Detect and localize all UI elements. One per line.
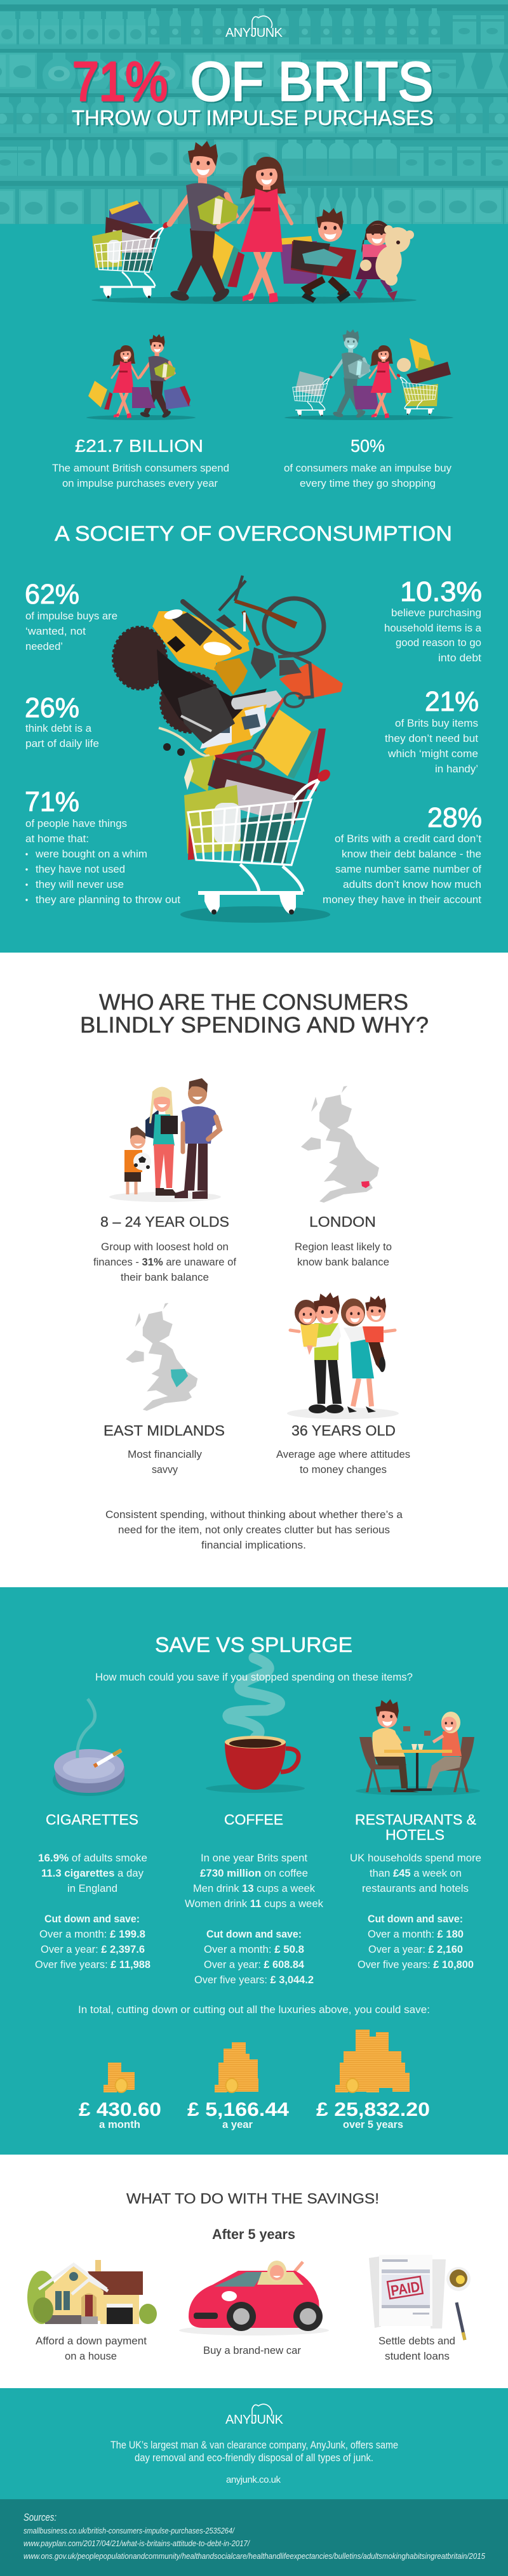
stat: 62%: needed’: [25, 640, 63, 652]
savings: a year: a year: [222, 2118, 253, 2130]
stat: 26%: [25, 692, 99, 750]
panel: East Midlands: EAST MIDLANDS: [104, 1422, 225, 1439]
stat: 71%: they have not used: [36, 863, 125, 875]
text: how much could you save: How much could you save if you stopped spending on these items?: [95, 1671, 413, 1683]
shopping cart contents: [92, 201, 159, 270]
icon: coin pile small: [104, 2063, 135, 2092]
footer: The UK’s largest man & van clearance company, AnyJunk, offers same: [110, 2439, 398, 2451]
panel: cigarettes: [35, 1699, 150, 1971]
savings: a month: £ 430.60: [79, 2098, 161, 2120]
stat: 28%: same number same number of: [335, 863, 481, 875]
panel: cigarettes: 11.3 cigarettes a day: [41, 1867, 144, 1879]
stat: 28%: [323, 802, 482, 906]
savings: a year: [187, 2042, 290, 2130]
heading: who are the consumers: BLINDLY SPENDING AND WHY?: [80, 1013, 429, 1038]
stat: £21.7 billion: [52, 334, 229, 489]
panel: coffee: Over a year: £ 608.84: [204, 1958, 305, 1971]
stat: 71%: they are planning to throw out: [36, 894, 180, 906]
bicycle: [219, 576, 324, 654]
illustration: paid invoice: PAID: [389, 2278, 421, 2299]
girl with teddy bear: [353, 221, 414, 301]
icon: ashtray: [53, 1699, 125, 1796]
panel: restaurants and hotels: RESTAURANTS &: [355, 1811, 476, 1828]
stat: £21.7 billion: The amount British consumers spend: [52, 462, 229, 474]
stat: 71%: they will never use: [36, 878, 124, 890]
panel: 8 to 24 year olds: 8 – 24 YEAR OLDS: [100, 1213, 229, 1230]
panel: restaurants and hotels: Cut down and save:: [368, 1913, 463, 1925]
sources: smallbusiness.co.uk/british-consumers-impulse-purchases-2535264/: [23, 2526, 235, 2535]
subheading: after 5 years: After 5 years: [212, 2226, 295, 2242]
panel: London: [295, 1086, 392, 1268]
panel: East Midlands: [104, 1303, 225, 1476]
map: UK with East Midlands highlighted: [126, 1303, 197, 1411]
title: OF BRITS: [190, 51, 433, 112]
panel: coffee: £730 million on coffee: [200, 1867, 308, 1879]
stat: 10.3%: good reason to go: [396, 637, 481, 649]
title: 71%: [72, 51, 168, 112]
icon: coffee cup: [206, 1736, 305, 1793]
stat: 71%: of people have things: [25, 817, 127, 829]
panel: debts: student loans: [385, 2350, 450, 2362]
shopping bags: [195, 228, 244, 287]
panel: car: Buy a brand-new car: [203, 2344, 301, 2356]
panel: coffee: Over five years: £ 3,044.2: [194, 1974, 314, 1986]
panel: restaurants and hotels: [350, 1699, 481, 1971]
illustration: young people: [109, 1078, 221, 1202]
stat: 62%: ‘wanted, not: [25, 625, 86, 637]
panel: cigarettes: Over five years: £ 11,988: [35, 1958, 150, 1971]
text: consistent spending note: Consistent spending, without thinking about whether there’s a: [105, 1509, 403, 1521]
stat: 71%: [25, 786, 180, 906]
stat: 26%: think debt is a: [25, 722, 92, 734]
panel: restaurants and hotels: restaurants and hotels: [362, 1882, 469, 1894]
stat: 50%: of consumers make an impulse buy: [284, 462, 451, 474]
footer: [110, 2404, 398, 2485]
icon: coffee steam: [228, 1658, 279, 1738]
stat: 21%: of Brits buy items: [395, 717, 478, 729]
panel: East Midlands: savvy: [152, 1463, 178, 1476]
panel: debts: [369, 2255, 471, 2362]
stat: 50%: [284, 329, 453, 489]
text: in total: In total, cutting down or cutting out all the luxuries above, you could save:: [78, 2004, 430, 2016]
footer: day removal and eco-friendly disposal of all types of junk.: [135, 2452, 373, 2464]
title: [72, 51, 434, 129]
panel: East Midlands: Most financially: [128, 1448, 202, 1460]
panel: house: [27, 2260, 157, 2362]
panel: coffee: In one year Brits spent: [201, 1852, 307, 1864]
logo: AnyJunk header: ANYJUNK: [225, 26, 283, 40]
stat: 62%: of impulse buys are: [25, 610, 117, 622]
panel: restaurants and hotels: Over five years: £ 10,800: [358, 1958, 474, 1971]
panel: restaurants and hotels: Over a month: £ 180: [368, 1928, 464, 1940]
stat: 62%: 62%: [25, 579, 79, 610]
illustration: family of four: [287, 1293, 399, 1419]
illustration: family shopping: [91, 141, 417, 304]
map: UK with London highlighted: [301, 1086, 379, 1203]
panel: cigarettes: 16.9% of adults smoke: [38, 1852, 147, 1864]
heading: a society of overconsumption: A SOCIETY OF OVERCONSUMPTION: [55, 522, 452, 545]
panel: supermarket shelves backdrop: [0, 0, 508, 229]
stat: 21%: which ‘might come: [387, 748, 478, 760]
couple with bags: [86, 334, 196, 420]
panel: cigarettes: Over a month: £ 199.8: [39, 1928, 145, 1940]
bags and boxes: [184, 693, 326, 863]
panel: 8 to 24 year olds: Group with loosest hold on: [101, 1241, 229, 1253]
savings: over 5 years: [316, 2030, 430, 2130]
panel: debts: Settle debts and: [378, 2335, 455, 2347]
savings: a month: [79, 2063, 161, 2130]
stat: 71%: 71%: [25, 786, 79, 817]
stat: 26%: 26%: [25, 692, 79, 723]
quad bike: [113, 602, 276, 743]
panel: 8 to 24 year olds: finances - 31% are unaware of: [93, 1256, 236, 1268]
panel: 8 to 24 year olds: their bank balance: [121, 1271, 209, 1283]
text: consistent spending note: financial implications.: [201, 1539, 306, 1551]
heading: what to do with the savings: WHAT TO DO WITH THE SAVINGS!: [126, 2190, 379, 2207]
panel: house: Afford a down payment: [36, 2335, 147, 2347]
panel: cigarettes: in England: [67, 1882, 117, 1894]
text: consistent spending note: [105, 1509, 403, 1551]
stat: 71%: were bought on a whim: [35, 848, 147, 860]
stat: 71%: at home that:: [25, 833, 89, 845]
boy with toy box: [291, 208, 356, 303]
savings: a year: £ 5,166.44: [187, 2098, 290, 2120]
sources: Sources:: [23, 2511, 57, 2523]
panel: London: know bank balance: [297, 1256, 389, 1268]
stat: 28%: money they have in their account: [323, 894, 481, 906]
panel: coffee: Cut down and save:: [206, 1928, 302, 1940]
stat: 10.3%: [384, 576, 482, 664]
stat: 26%: part of daily life: [25, 737, 99, 750]
couple with carts: [284, 329, 453, 420]
stat: 28%: adults don’t know how much: [343, 878, 481, 890]
illustration: red car: [179, 2261, 329, 2335]
sources: www.payplan.com/2017/04/21/what-is-britains-attitude-to-debt-in-2017/: [23, 2539, 250, 2548]
illustration: house: [27, 2260, 157, 2324]
savings: over 5 years: £ 25,832.20: [316, 2098, 430, 2120]
panel: coffee: Women drink 11 cups a week: [185, 1898, 323, 1910]
panel: cigarettes: Over a year: £ 2,397.6: [41, 1943, 145, 1955]
panel: London: LONDON: [309, 1213, 376, 1230]
panel: cigarettes: CIGARETTES: [46, 1811, 138, 1828]
stat: £21.7 billion: £21.7 BILLION: [75, 436, 203, 456]
panel: London: Region least likely to: [295, 1241, 392, 1253]
stat: 21%: [385, 686, 479, 775]
title: THROW OUT IMPULSE PURCHASES: [72, 106, 434, 129]
stat: £21.7 billion: on impulse purchases every year: [62, 477, 218, 489]
panel: house: on a house: [65, 2350, 117, 2362]
panel: coffee: Over a month: £ 50.8: [204, 1943, 304, 1955]
panel: 36 years old: to money changes: [300, 1463, 387, 1476]
panel: restaurants and hotels: Over a year: £ 2,160: [368, 1943, 463, 1955]
panel: 36 years old: 36 YEARS OLD: [291, 1422, 396, 1439]
stat: 28%: know their debt balance - the: [342, 848, 481, 860]
stat: 62%: [25, 579, 117, 652]
panel: restaurants and hotels: than £45 a week on: [370, 1867, 462, 1879]
stat: 10.3%: believe purchasing: [391, 607, 481, 619]
panel: restaurants and hotels: HOTELS: [385, 1826, 444, 1843]
panel: 8 to 24 year olds: [93, 1078, 236, 1283]
panel: coffee: COFFEE: [224, 1811, 283, 1828]
panel: 36 years old: Average age where attitudes: [276, 1448, 410, 1460]
icon: coin pile large: [335, 2030, 410, 2092]
stat: 28%: of Brits with a credit card don’t: [335, 833, 481, 845]
stat: 10.3%: household items is a: [384, 622, 482, 634]
savings: over 5 years: over 5 years: [343, 2118, 403, 2130]
stat: 50%: 50%: [351, 436, 385, 456]
logo: AnyJunk header: [225, 16, 283, 40]
panel: cigarettes: Cut down and save:: [44, 1913, 140, 1925]
chainsaw: [278, 656, 343, 698]
heading: save vs splurge: SAVE VS SPLURGE: [155, 1633, 352, 1656]
savings: a month: a month: [99, 2118, 140, 2130]
sources: [23, 2511, 486, 2561]
stat: 28%: 28%: [427, 802, 482, 833]
footer: anyjunk.co.uk: [226, 2474, 281, 2485]
stat: 10.3%: into debt: [438, 652, 481, 664]
stat: 21%: in handy’: [435, 763, 478, 775]
panel: 36 years old: [276, 1293, 410, 1476]
stat: 21%: 21%: [425, 686, 479, 717]
heading: who are the consumers: [80, 990, 429, 1038]
skates, skateboard and scooter: [159, 685, 283, 762]
icon: coin pile medium: [215, 2042, 258, 2092]
heading: who are the consumers: WHO ARE THE CONSUMERS: [99, 990, 408, 1015]
stat: 21%: they don’t need but: [385, 732, 478, 744]
stat: 50%: every time they go shopping: [300, 477, 436, 489]
logo: AnyJunk footer: ANYJUNK: [225, 2413, 284, 2427]
panel: car: [179, 2261, 329, 2356]
stat: 10.3%: 10.3%: [400, 576, 482, 607]
logo: AnyJunk footer: [225, 2404, 284, 2427]
panel: coffee: Men drink 13 cups a week: [193, 1882, 315, 1894]
illustration: cart piled with goods: [113, 576, 343, 923]
illustration: couple at table: [356, 1699, 480, 1795]
panel: coffee: [185, 1736, 323, 1986]
text: consistent spending note: need for the item, not only creates clutter but has serious: [118, 1524, 390, 1536]
illustration: paid invoice: [369, 2255, 471, 2340]
panel: restaurants and hotels: UK households spend more: [350, 1852, 481, 1864]
